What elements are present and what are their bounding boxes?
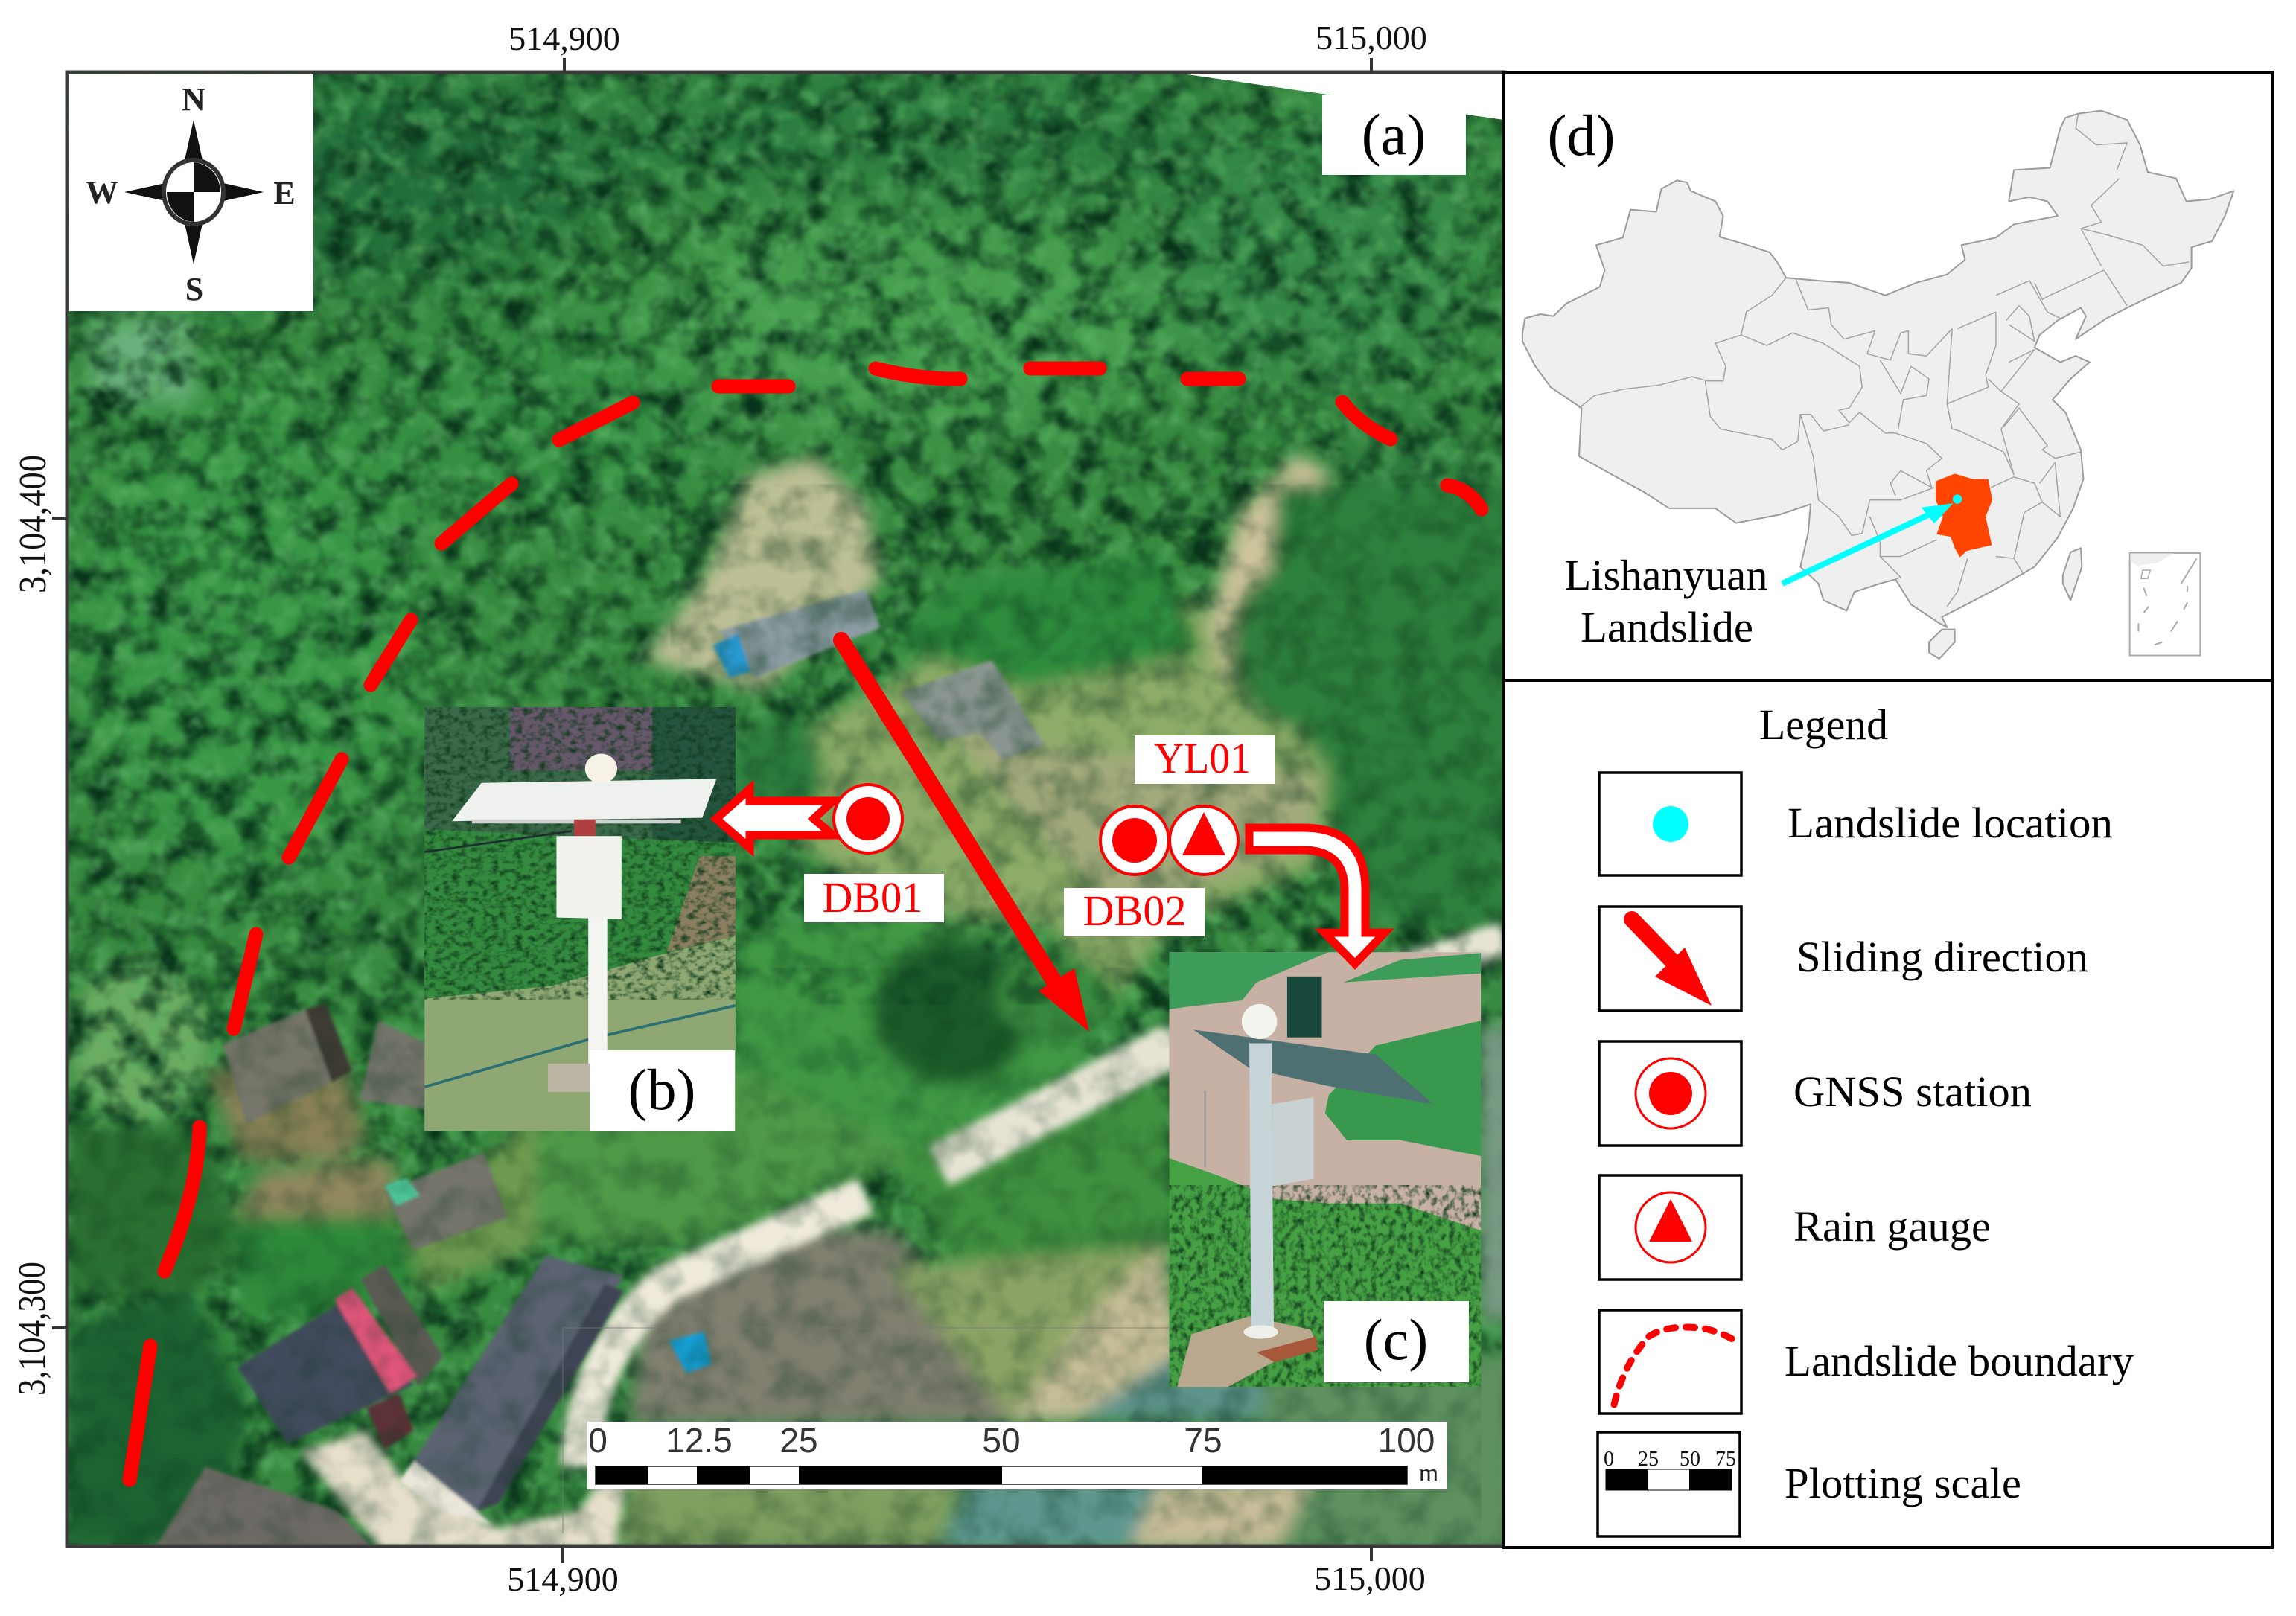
Hunan province highlight: [1936, 473, 1992, 558]
legend: GNSS station: GNSS station: [1793, 1067, 2032, 1116]
coordinate ticks: [52, 58, 1519, 1563]
coordinate labels: 515,000: [1314, 1559, 1426, 1597]
aerial imagery: [67, 66, 1511, 1549]
scale bar: 100: [1378, 1421, 1435, 1460]
scale bar: [587, 1421, 1447, 1489]
buildings: [154, 590, 1045, 1549]
station DB01: DB01: [822, 873, 923, 922]
legend: rain gauge: [1599, 1175, 1991, 1280]
map frame: [67, 72, 1504, 1546]
panel: legend: [1504, 680, 2272, 1548]
clearing and ground: [68, 455, 1511, 1549]
legend: plotting scale: 0: [1604, 1448, 1614, 1471]
compass box: N: [182, 81, 205, 118]
legend: landslide boundary: Landslide boundary: [1785, 1337, 2134, 1385]
legend: landslide boundary: [1599, 1310, 2134, 1414]
coordinate labels: 515,000: [1316, 19, 1427, 57]
legend: GNSS station: [1599, 1041, 2032, 1146]
photo (c): [1169, 952, 1481, 1387]
legend: landslide location: [1599, 773, 2113, 875]
compass box: [69, 74, 313, 311]
label (a): (a): [1362, 102, 1426, 167]
location label: [1565, 551, 1767, 651]
location label: Landslide: [1581, 603, 1753, 651]
label (a): [1322, 95, 1466, 175]
scale bar: 12.5: [666, 1421, 733, 1460]
station DB02: DB02: [1082, 887, 1187, 935]
legend: sliding direction: Sliding direction: [1796, 933, 2088, 981]
photo (b): [424, 707, 736, 1131]
location label: Lishanyuan: [1565, 551, 1767, 599]
panel: (d) location map: [1504, 72, 2272, 680]
station DB02: [1064, 806, 1205, 936]
scale bar: 50: [982, 1421, 1021, 1460]
legend: plotting scale: 50: [1680, 1448, 1700, 1471]
South China Sea inset: [2130, 553, 2200, 655]
arrow: DB01 to photo b: [716, 789, 833, 848]
China map: [1522, 111, 2233, 659]
top-right image edge: [1172, 72, 1504, 120]
legend: plotting scale: [1598, 1432, 2021, 1536]
coordinate labels: 3,104,400: [1508, 453, 1550, 586]
station YL01 rain gauge: YL01: [1154, 734, 1251, 782]
station DB01: [804, 785, 944, 922]
scale bar: 25: [779, 1421, 818, 1460]
scale bar: 75: [1184, 1421, 1222, 1460]
legend: landslide location: Landslide location: [1788, 799, 2113, 847]
arrow: YL01 to photo c: [1249, 828, 1385, 964]
road: [579, 939, 1505, 1467]
scale bar: 0: [588, 1421, 608, 1460]
location arrow: [1782, 503, 1954, 584]
coordinate labels: 3,104,300: [1517, 1264, 1559, 1398]
legend: plotting scale: 25: [1638, 1448, 1659, 1471]
photo (c): (c): [1364, 1307, 1428, 1372]
coordinate labels: 3,104,400: [12, 455, 54, 593]
photo (b): (b): [628, 1057, 695, 1122]
label (d): (d): [1548, 103, 1615, 167]
compass box: S: [185, 271, 203, 307]
coordinate labels: 514,900: [507, 1560, 619, 1598]
coordinate labels: 514,900: [508, 19, 620, 57]
coordinate labels: 3,104,300: [11, 1262, 54, 1396]
compass box: W: [86, 174, 118, 211]
legend: plotting scale: 75: [1715, 1448, 1736, 1471]
coordinate labels: [11, 19, 1559, 1598]
compass box: E: [273, 175, 296, 211]
legend: plotting scale: Plotting scale: [1785, 1459, 2021, 1507]
legend title: Legend: [1759, 700, 1888, 749]
location marker: [1953, 494, 1962, 504]
scale bar: m: [1419, 1460, 1438, 1487]
panel: (a) aerial map: [67, 66, 1511, 1549]
sliding direction arrow: [841, 640, 1089, 1032]
legend: sliding direction: [1599, 907, 2088, 1011]
legend: rain gauge: Rain gauge: [1793, 1202, 1991, 1251]
landslide boundary: [130, 368, 1482, 1480]
station YL01 rain gauge: [1135, 734, 1275, 875]
